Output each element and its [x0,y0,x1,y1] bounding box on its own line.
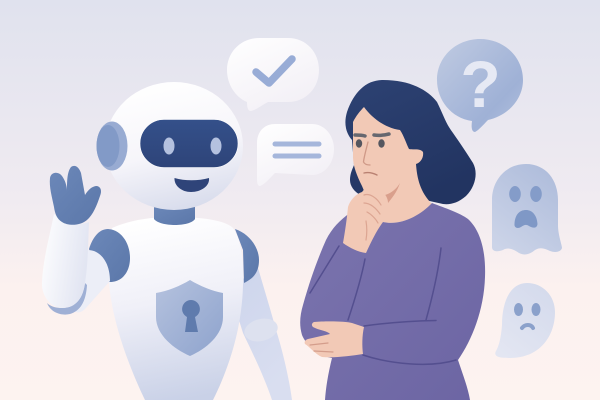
robot left shoulder [89,229,130,282]
small ghost frown [522,325,533,328]
robot smile [174,178,209,192]
sweater sleeve folds [310,246,456,364]
small ghost [495,283,555,358]
woman neck and face [353,107,432,223]
robot head [105,82,243,210]
text lines icon [275,144,319,156]
keyhole [182,300,200,332]
robot torso [108,217,243,400]
shield with keyhole [156,280,223,356]
robot waving arm [42,214,110,315]
robot hand [50,166,101,225]
woman hair [345,80,476,204]
robot [42,82,292,400]
large ghost [492,164,562,254]
robot visor [140,120,238,168]
small ghost eyes [514,303,540,316]
robot ear [96,122,128,170]
woman nose [364,142,370,165]
speech bubble: text lines [257,124,334,186]
woman resting hand [305,321,364,357]
robot right arm [235,229,292,400]
woman [300,80,485,400]
woman mouth [364,173,377,175]
robot neck [154,205,195,225]
speech bubble: question mark [437,39,523,132]
speech bubble: check mark [227,38,319,111]
woman eyes [356,139,385,148]
question mark: ? [460,47,501,121]
check icon [256,59,292,83]
ghost eyes [509,186,542,202]
robot eyes [164,138,222,154]
woman raised hand [343,185,388,253]
woman sweater [300,203,485,400]
woman neck shadow [385,183,400,203]
woman eyebrows [355,134,389,136]
ghost open mouth [514,210,538,228]
